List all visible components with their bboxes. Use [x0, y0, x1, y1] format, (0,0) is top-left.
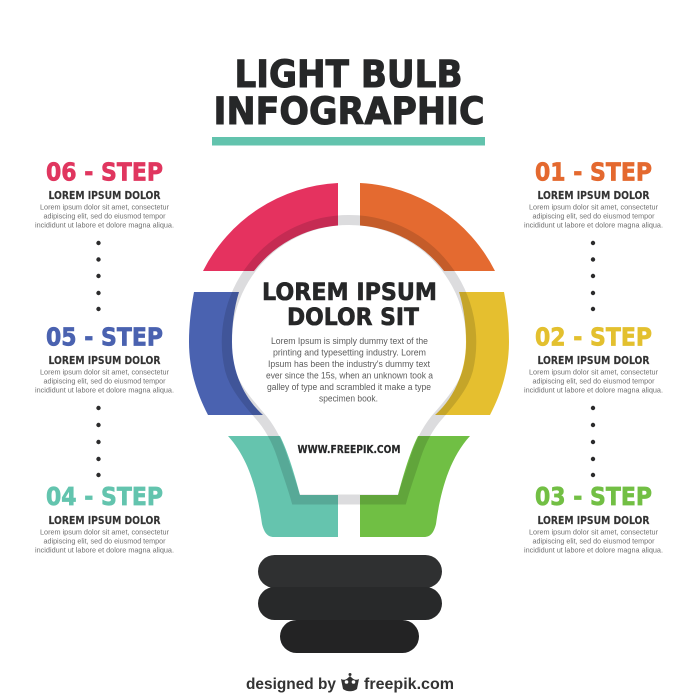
step 02: Lorem ipsum dolor sit amet, consectetur	[529, 368, 659, 376]
center url: WWW.FREEPIK.COM	[298, 444, 400, 456]
step 02: LOREM IPSUM DOLOR	[538, 355, 650, 367]
title: LIGHT BULB	[234, 53, 462, 96]
step 03: 03 - STEP	[535, 482, 652, 511]
dotted connector: right upper	[591, 241, 595, 311]
segment: teal	[228, 436, 338, 537]
center paragraph	[266, 336, 433, 404]
step 06: 06 - STEP	[46, 158, 163, 186]
title underline	[212, 137, 485, 146]
step 03: Lorem ipsum dolor sit amet, consectetur	[529, 528, 659, 536]
step 05: LOREM IPSUM DOLOR	[48, 355, 161, 367]
step 01: Lorem ipsum dolor sit amet, consectetur	[529, 202, 659, 212]
center paragraph: ever since the 15s, when an unknown took a	[266, 370, 433, 380]
center paragraph: specimen book.	[319, 394, 378, 404]
step 03: incididunt ut labore et dolore magna aliqua.	[524, 546, 663, 554]
step 01: incididunt ut labore et dolore magna aliqua.	[524, 220, 663, 230]
step 06: adipiscing elit, sed do eiusmod tempor	[44, 212, 166, 220]
center heading: DOLOR SIT	[287, 303, 420, 331]
base: bottom ridge	[280, 620, 419, 653]
icon: freepik mascot	[341, 673, 359, 691]
footer credit: designed by	[246, 676, 336, 693]
step 04: 04 - STEP	[46, 482, 163, 511]
footer credit: freepik.com	[364, 676, 454, 693]
step 02	[524, 322, 663, 394]
base: middle ridge	[258, 587, 442, 620]
step 04: adipiscing elit, sed do eiusmod tempor	[44, 536, 166, 546]
step 04	[35, 482, 174, 554]
base: top ridge	[258, 555, 442, 588]
dotted connector: left upper	[96, 241, 101, 311]
step 06: incididunt ut labore et dolore magna aliqua.	[35, 220, 174, 230]
center paragraph: printing and typesetting industry. Lorem	[273, 348, 426, 358]
step 02: adipiscing elit, sed do eiusmod tempor	[532, 376, 655, 386]
title: INFOGRAPHIC	[214, 90, 484, 133]
center text block	[262, 278, 437, 456]
segment: orange	[360, 183, 495, 271]
bulb outline ring	[227, 220, 471, 500]
center heading	[262, 278, 437, 331]
center heading: LOREM IPSUM	[262, 278, 437, 306]
step 03: adipiscing elit, sed do eiusmod tempor	[532, 536, 655, 546]
dotted connector: left lower	[96, 406, 101, 477]
segment: green	[360, 436, 470, 537]
light bulb	[189, 183, 509, 537]
step 01	[524, 158, 663, 230]
step 01: adipiscing elit, sed do eiusmod tempor	[532, 212, 655, 220]
segment: blue	[189, 292, 263, 415]
step 04: incididunt ut labore et dolore magna aliqua.	[35, 546, 174, 554]
bulb base	[258, 555, 442, 653]
dotted connector: right lower	[591, 406, 595, 477]
footer credit	[246, 673, 454, 693]
step 05: Lorem ipsum dolor sit amet, consectetur	[40, 368, 170, 376]
step 03	[524, 482, 663, 554]
step 05	[35, 322, 174, 394]
center paragraph: galley of type and scrambled it make a type	[267, 382, 431, 392]
title	[214, 53, 484, 133]
step 05: adipiscing elit, sed do eiusmod tempor	[44, 376, 166, 386]
step 04: Lorem ipsum dolor sit amet, consectetur	[40, 528, 170, 536]
step 02: incididunt ut labore et dolore magna aliqua.	[524, 386, 663, 394]
segment: yellow	[435, 292, 509, 415]
step 06: Lorem ipsum dolor sit amet, consectetur	[40, 202, 170, 212]
step 03: LOREM IPSUM DOLOR	[538, 515, 650, 527]
step 01: 01 - STEP	[535, 158, 652, 186]
center paragraph: Lorem Ipsum is simply dummy text of the	[271, 336, 428, 346]
step 06	[35, 158, 174, 230]
step 02: 02 - STEP	[535, 322, 652, 352]
step 01: LOREM IPSUM DOLOR	[538, 190, 650, 202]
step 05: incididunt ut labore et dolore magna aliqua.	[35, 386, 174, 394]
step 04: LOREM IPSUM DOLOR	[48, 515, 161, 527]
step 05: 05 - STEP	[46, 322, 163, 352]
center paragraph: Ipsum has been the industry's dummy text	[268, 359, 431, 369]
step 06: LOREM IPSUM DOLOR	[48, 190, 161, 202]
segment: red	[203, 183, 338, 271]
